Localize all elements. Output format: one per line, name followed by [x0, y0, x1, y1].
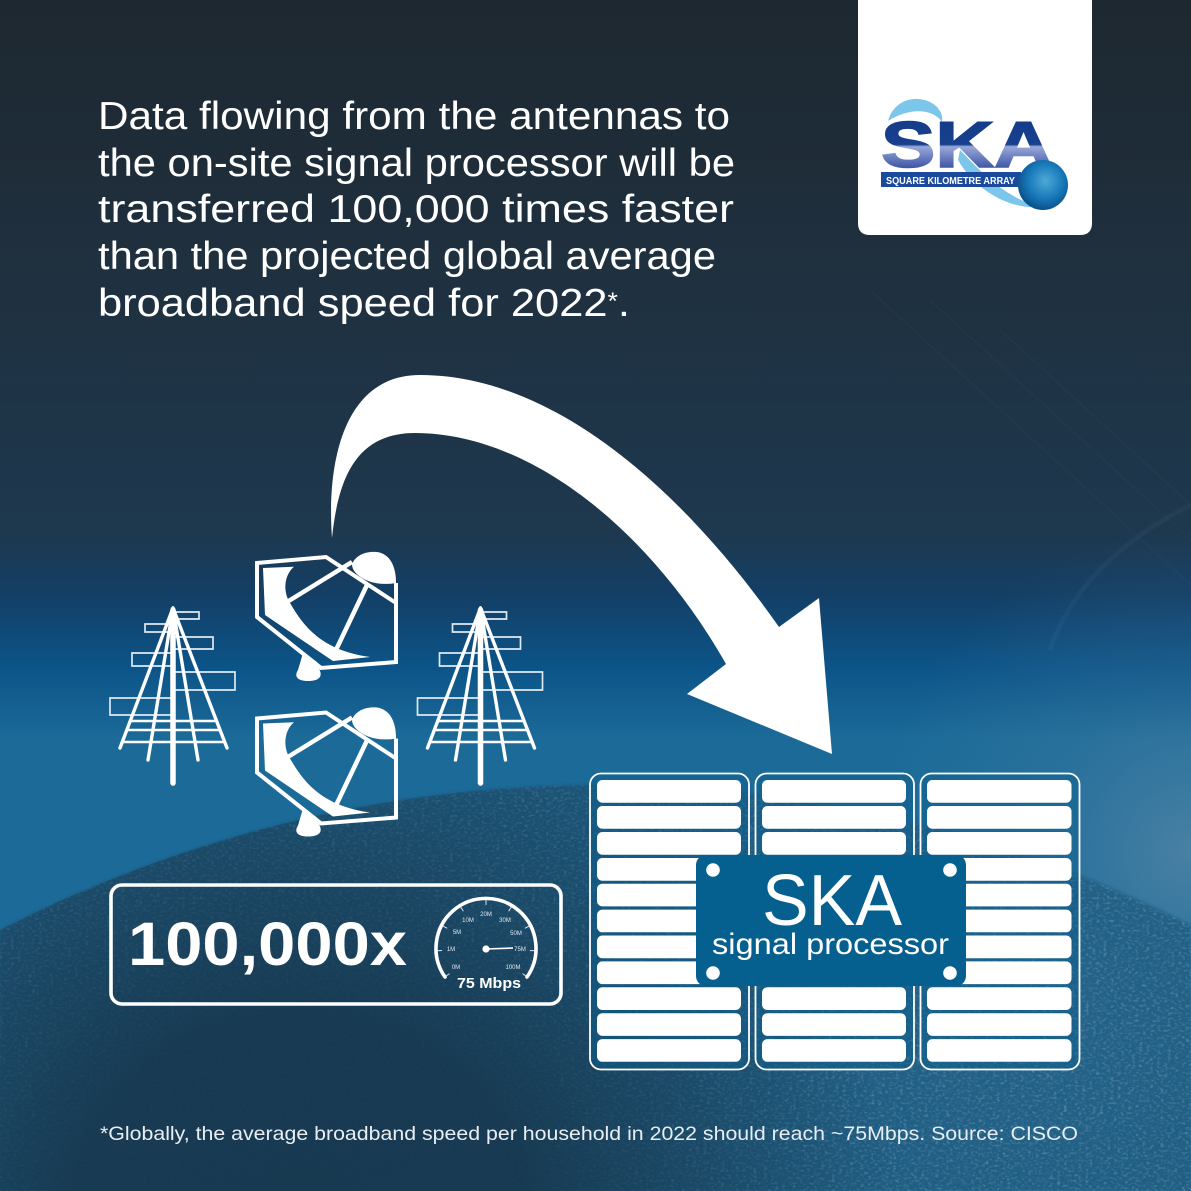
icon: left low-frequency antenna tower: [110, 608, 235, 783]
headline text: .: [618, 282, 630, 325]
icon: lower dish antenna: [257, 707, 396, 836]
100,000x figure: 100,000x: [128, 910, 407, 978]
icon: upper dish antenna: [257, 552, 396, 681]
logo swoosh: [888, 99, 1040, 207]
icon: speedometer: 75M: [514, 947, 526, 953]
panel: signal processor racks: [590, 774, 1080, 1070]
logo card: [858, 0, 1092, 235]
headline text: than the projected global average: [98, 235, 716, 278]
logo strapline: SQUARE KILOMETRE ARRAY: [886, 175, 1015, 187]
headline text: [98, 95, 735, 325]
headline text: Data flowing from the antennas to: [98, 95, 730, 138]
icon: speedometer: 0M: [452, 965, 460, 971]
icon: speedometer: 20M: [480, 912, 492, 918]
processor nameplate: [696, 855, 966, 986]
speed comparison box: [111, 885, 561, 1004]
icon: speedometer: 5M: [453, 930, 461, 936]
icon: right low-frequency antenna tower: [418, 608, 542, 783]
logo wordmark: SKA: [881, 108, 1053, 181]
processor nameplate: SKA: [762, 861, 902, 941]
icon: speedometer: 50M: [510, 931, 522, 937]
icon: speedometer: 30M: [499, 918, 511, 924]
icon: speedometer: 10M: [462, 918, 474, 924]
footnote: *Globally, the average broadband speed per household in 2022 should reach ~75Mbps. Source: CISCO: [100, 1123, 1078, 1145]
logo sphere: [1018, 160, 1068, 210]
rack slots: [597, 780, 1072, 1062]
processor nameplate: signal processor: [712, 928, 949, 961]
icon: speedometer: [436, 898, 536, 992]
icon: speedometer: 1M: [447, 947, 455, 953]
headline text: transferred 100,000 times faster: [98, 188, 734, 231]
arrow: data flow from antennas to processor: [331, 375, 832, 754]
icon: speedometer: 100M: [505, 965, 521, 971]
headline text: the on-site signal processor will be: [98, 142, 735, 185]
headline text: *: [608, 288, 618, 315]
headline text: broadband speed for 2022: [98, 282, 556, 325]
rack frames: [590, 774, 1080, 1070]
icon: speedometer: 75 Mbps: [457, 975, 521, 992]
